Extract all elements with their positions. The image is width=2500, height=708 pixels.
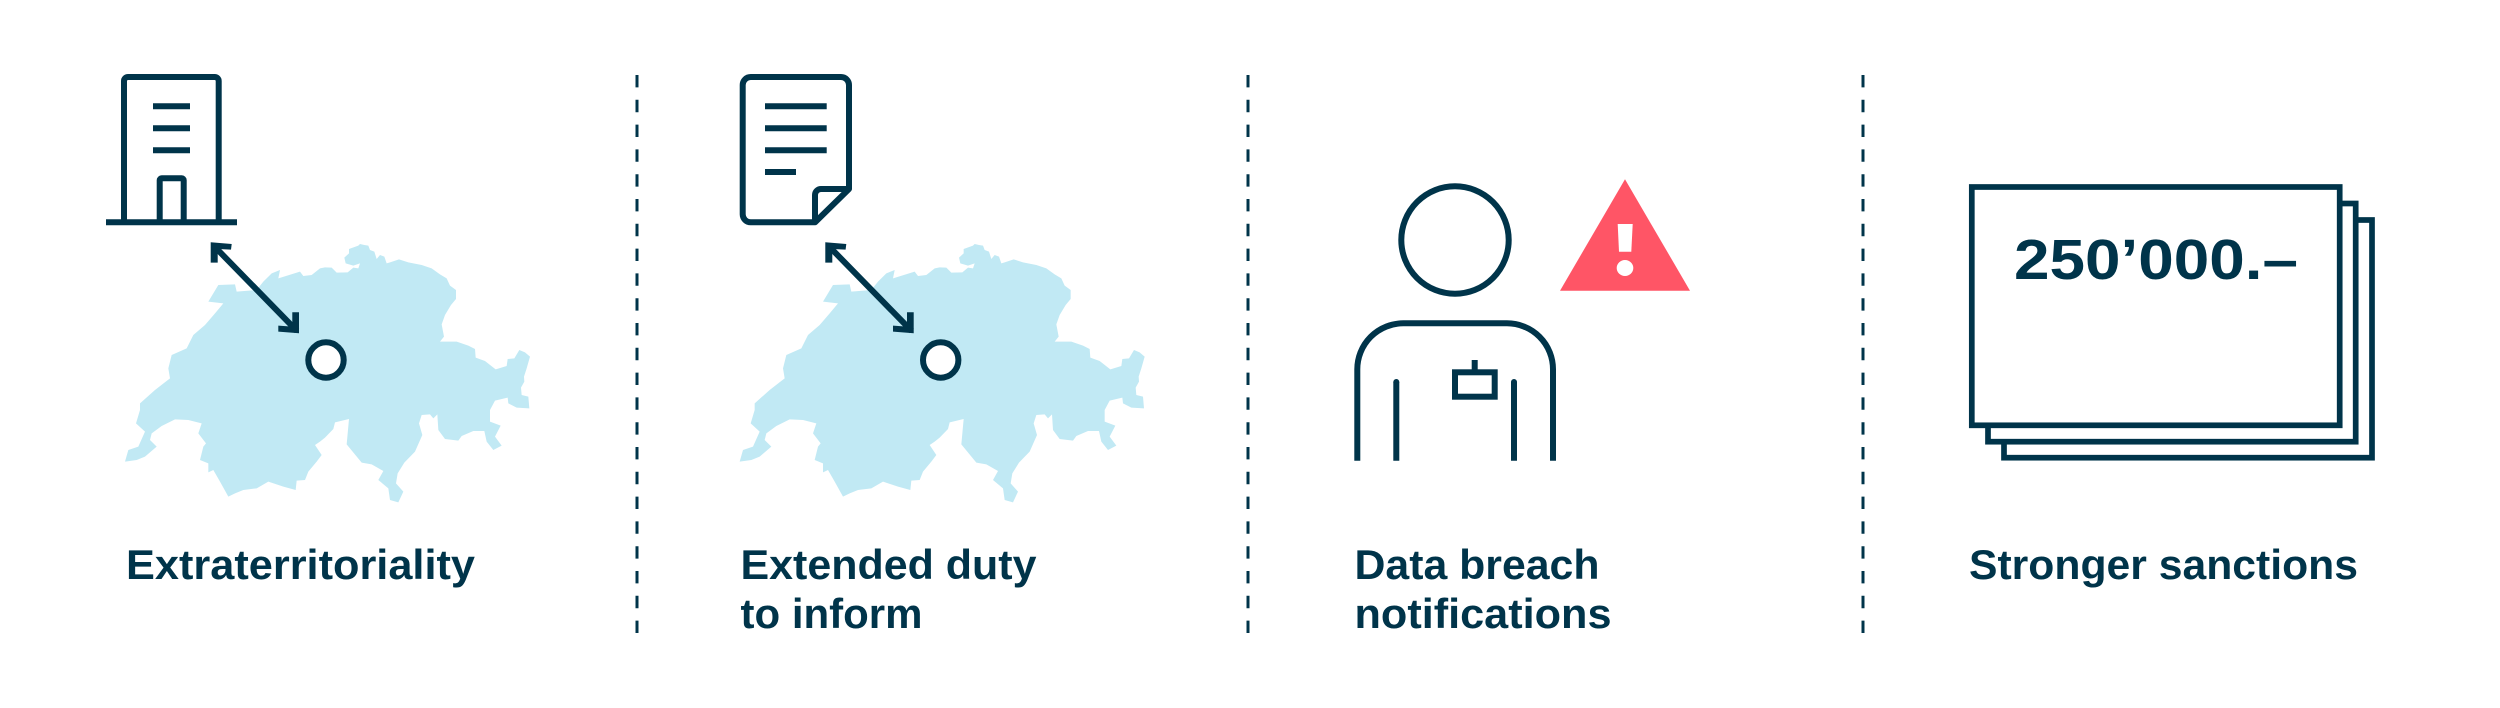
label: Data breach notifications: Data breach	[1354, 541, 1600, 588]
label: Extended duty to inform: to inform	[740, 590, 922, 637]
icon: location marker	[923, 342, 958, 378]
arrow: document to Switzerland	[825, 242, 914, 333]
icon: office building	[106, 77, 237, 222]
label: Data breach notifications: notifications	[1354, 590, 1612, 637]
icon: person with badge	[1357, 186, 1553, 461]
icon: map of Switzerland	[740, 244, 1145, 502]
label: Data breach notifications	[1354, 541, 1612, 637]
label: Stronger sanctions: Stronger sanctions	[1969, 541, 2358, 588]
label: Extraterritoriality: Extraterritoriality	[126, 541, 476, 588]
icon: document	[743, 77, 849, 222]
panel: extended duty to inform	[740, 77, 1145, 637]
amount: 250'000.-: 250’000.–	[2014, 228, 2298, 292]
panel: data breach notifications	[1354, 179, 1690, 637]
icon: map of Switzerland	[125, 244, 530, 502]
label: Extended duty to inform	[740, 541, 1037, 637]
icon: stacked fine notices	[1972, 187, 2372, 458]
panel: extraterritoriality	[106, 77, 530, 588]
icon: warning triangle	[1560, 179, 1690, 291]
label: Extended duty to inform: Extended duty	[740, 541, 1037, 588]
panel: stronger sanctions	[1969, 187, 2372, 588]
arrow: building to Switzerland	[211, 242, 299, 333]
icon: location marker	[308, 342, 344, 378]
